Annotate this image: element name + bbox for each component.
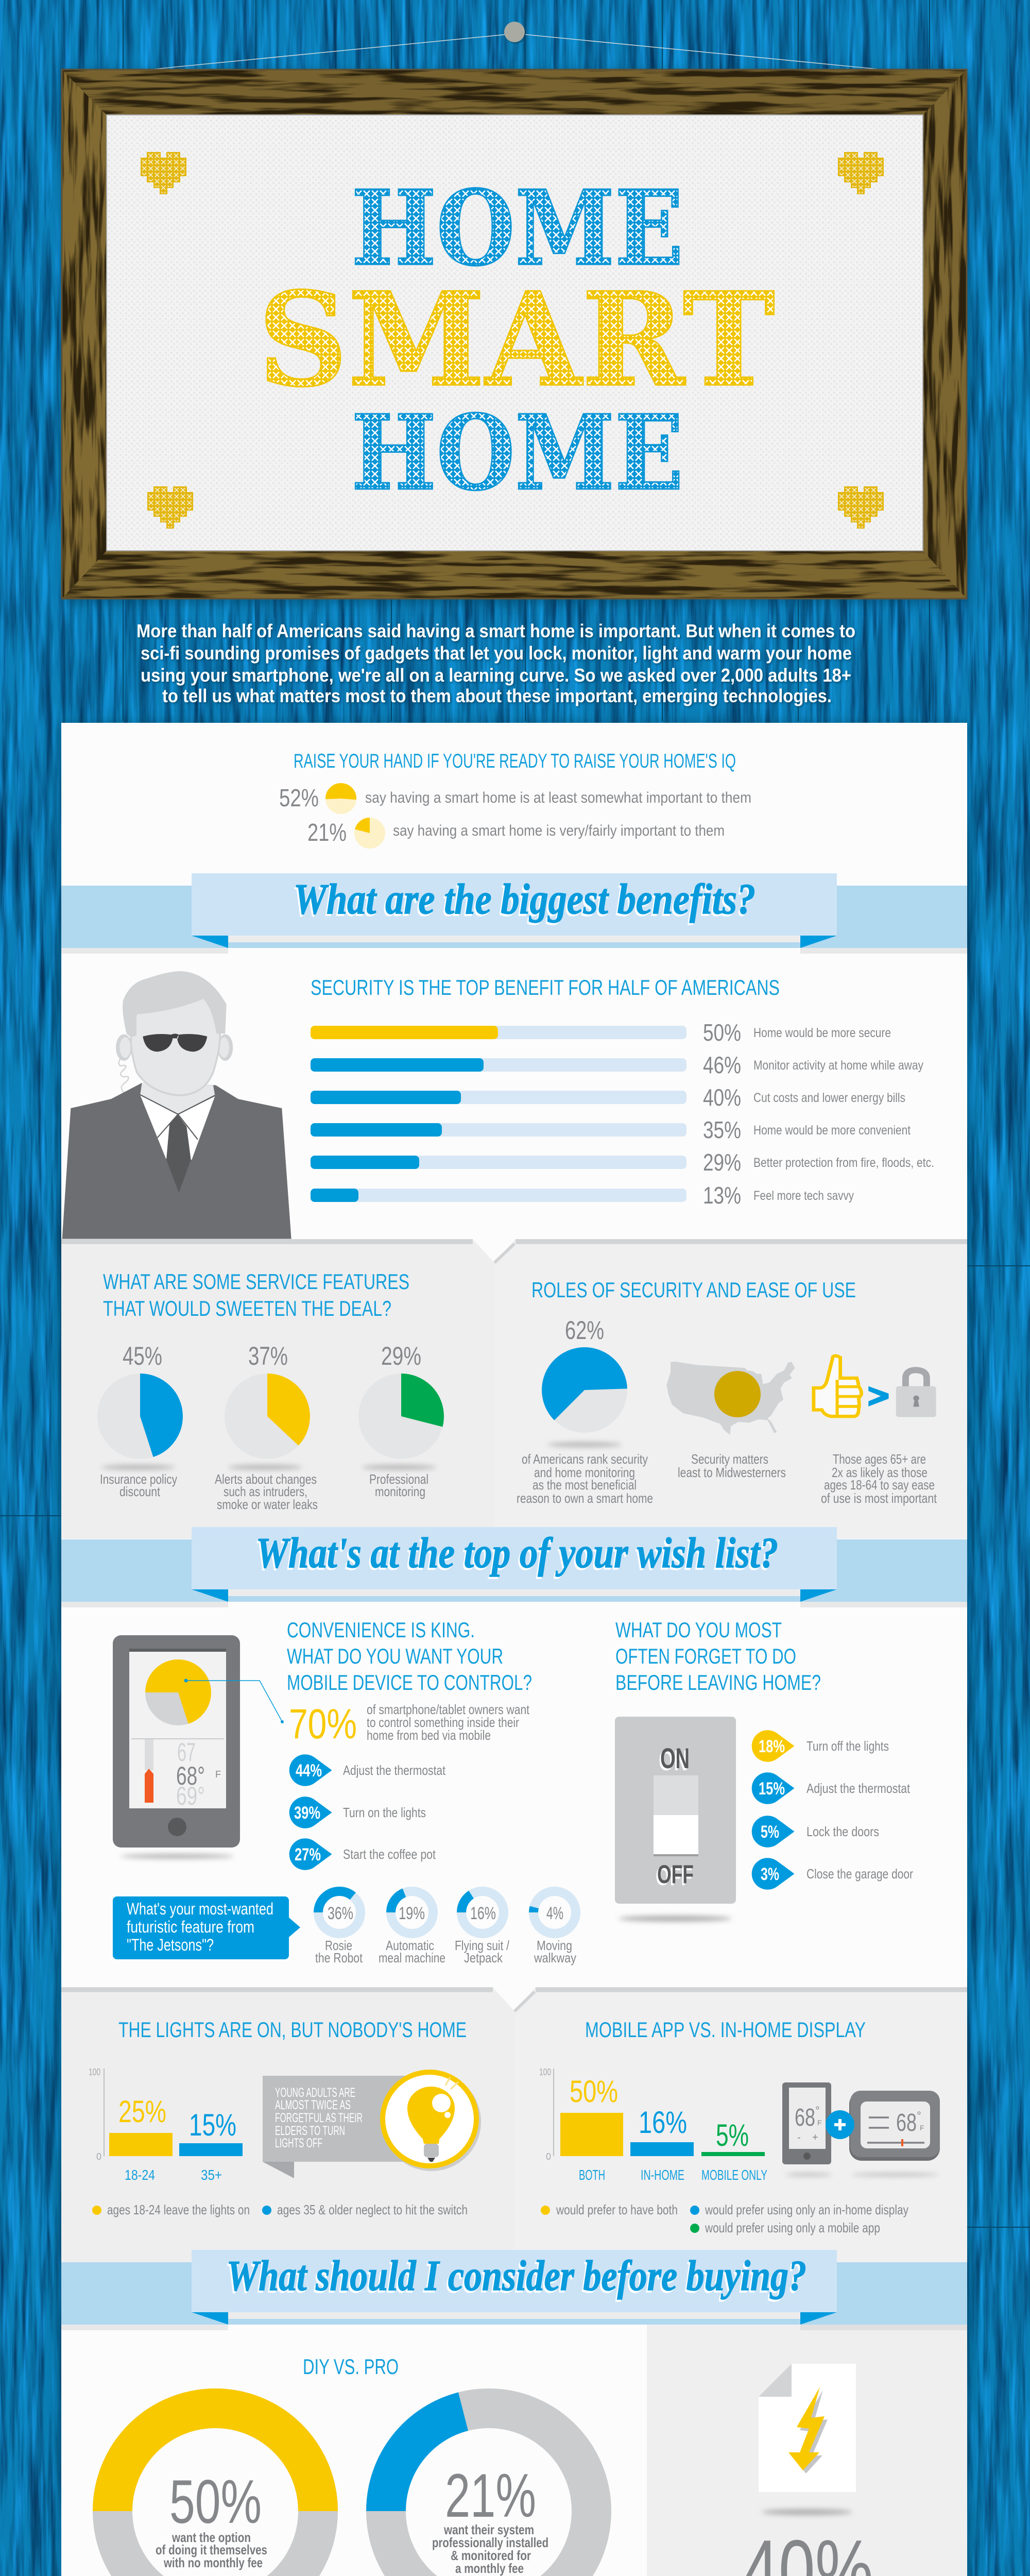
banner: what should I consider [61, 2250, 967, 2330]
stat: 52 percent: 52% [279, 785, 319, 812]
item: 39 percent: Turn on the lights [343, 1805, 426, 1820]
map: midwest highlighted [666, 1362, 795, 1480]
item: 39 percent: 39% [294, 1803, 320, 1823]
pie: 62 percent [517, 1316, 653, 1506]
title: HOME: HOME [351, 393, 683, 514]
heading: THE LIGHTS ARE ON, BUT NOBODY'S HOME [118, 2018, 467, 2042]
item: 15 percent: Adjust the thermostat [806, 1781, 911, 1796]
bar chart: lights left on: 15% [189, 2108, 236, 2142]
item: 15 percent: 15% [759, 1779, 785, 1799]
pie: 29 percent: 29% [381, 1342, 421, 1370]
illustration: light switch [615, 1717, 736, 1922]
donut: 21 percent: professionally installed [432, 2535, 548, 2550]
callout: young adults with light bulb: LIGHTS OFF [275, 2136, 322, 2150]
illustration: phone plus thermostat: - [797, 2132, 801, 2143]
heading [287, 1618, 532, 1694]
icon: thumbs up greater than lock: Those ages 65+ are [833, 1451, 926, 1467]
donut: 21 percent: 21% [445, 2461, 536, 2530]
donut: 50 percent [107, 2408, 323, 2576]
panel: diy vs pro [107, 2354, 597, 2576]
bar: convenient [311, 1116, 911, 1143]
panel: convenience is king [287, 1618, 532, 1870]
panel: roles of security and ease of use [517, 1278, 937, 1506]
donut: 50 percent: want the option [171, 2530, 251, 2545]
illustration: security man [62, 971, 291, 1239]
pie: 37 percent [215, 1342, 318, 1512]
illustration: phone plus thermostat: F [817, 2119, 822, 2127]
heading: raise your hand: RAISE YOUR HAND IF YOU'RE READY TO RAISE YOUR HOME'S IQ [294, 750, 736, 772]
donut: rosie the robot: the Robot [315, 1950, 363, 1965]
bar: cut costs [311, 1084, 905, 1111]
bar: protection: 29% [703, 1149, 741, 1176]
pie: 62 percent: reason to own a smart home [517, 1490, 653, 1506]
bar: home more secure: Home would be more secure [753, 1026, 891, 1040]
panel: service features [97, 1269, 444, 1512]
heading: MOBILE DEVICE TO CONTROL? [287, 1670, 532, 1694]
callout: jetsons: futuristic feature from [127, 1918, 254, 1936]
icon: heart bottom right [838, 487, 883, 528]
bar chart: app or display: IN-HOME [641, 2167, 684, 2183]
bar chart: lights left on [89, 2067, 243, 2183]
pie: 37 percent: smoke or water leaks [217, 1497, 318, 1512]
bar chart: lights left on: 100 [89, 2067, 100, 2077]
pie: 37 percent: Alerts about changes [215, 1471, 317, 1487]
panel: most often forget [615, 1618, 913, 1922]
donut: 21 percent: a monthly fee [455, 2561, 524, 2576]
illustration: phone plus thermostat [782, 2082, 940, 2176]
donut: 50 percent: of doing it themselves [156, 2542, 267, 2557]
panel: mobile app vs in-home display [539, 2018, 940, 2235]
heading: CONVENIENCE IS KING. [287, 1618, 475, 1642]
pie: 62 percent: and home monitoring [534, 1465, 635, 1480]
illustration: phone with thermostat: 67 [177, 1738, 196, 1767]
legend: app or display: would prefer using only an in-home display [705, 2202, 908, 2217]
legend: app or display [541, 2202, 908, 2235]
callout: young adults with light bulb: YOUNG ADULTS ARE [275, 2086, 355, 2100]
pie: 45 percent: 45% [123, 1342, 162, 1370]
donut: flying suit: Flying suit / [455, 1938, 510, 1953]
icon: heart bottom left [148, 487, 193, 528]
bar chart: lights left on: 18-24 [125, 2167, 155, 2183]
illustration: phone plus thermostat: ° [815, 2104, 820, 2117]
item: 3 percent [752, 1858, 913, 1890]
illustration: light switch: OFF [657, 1860, 694, 1889]
intro paragraph: to tell us what matters most to them about these important, emerging technologies. [162, 685, 832, 706]
bar chart: app or display: MOBILE ONLY [701, 2167, 767, 2183]
icon: thumbs up greater than lock: 2x as likely as those [832, 1465, 928, 1480]
illustration: phone plus thermostat: F [920, 2124, 924, 2132]
heading: WHAT ARE SOME SERVICE FEATURES [103, 1269, 409, 1294]
icon: thumbs up greater than lock: ages 18-64 to say ease [824, 1477, 935, 1493]
stat: 70 percent [289, 1701, 530, 1748]
legend: app or display: would prefer using only a mobile app [705, 2220, 880, 2235]
item: 44 percent: Adjust the thermostat [343, 1762, 446, 1778]
item: 15 percent [752, 1772, 911, 1804]
legend: app or display: would prefer to have both [556, 2202, 678, 2217]
pie: 37 percent: such as intruders, [224, 1484, 307, 1499]
heading: security: SECURITY IS THE TOP BENEFIT FOR HALF OF AMERICANS [311, 975, 780, 999]
pie: 45 percent: discount [119, 1484, 161, 1499]
donut: moving walkway: walkway [534, 1950, 576, 1965]
bar chart: app or display: BOTH [579, 2167, 605, 2183]
cross-stitch canvas [107, 115, 923, 551]
donut: meal machine [379, 1891, 445, 1965]
bar chart: app or display: 5% [716, 2118, 749, 2153]
item: 3 percent: 3% [761, 1865, 779, 1884]
bar chart: app or display: 16% [639, 2105, 687, 2140]
bar: cut costs: 40% [703, 1084, 741, 1111]
bar: protection [311, 1149, 934, 1176]
illustration: phone with thermostat: 68° [176, 1761, 205, 1790]
panel: energy bill [734, 2364, 880, 2576]
bar chart: lights left on: 25% [118, 2094, 166, 2129]
item: 27 percent: 27% [295, 1845, 321, 1865]
item: 3 percent: Close the garage door [806, 1866, 913, 1882]
donut: 50 percent: with no monthly fee [163, 2555, 263, 2570]
donut: rosie the robot: Rosie [325, 1938, 352, 1953]
heading: WHAT DO YOU MOST [615, 1618, 782, 1642]
intro paragraph: using your smartphone, we're all on a learning curve. So we asked over 2,000 adults 18+ [141, 665, 851, 686]
donut: meal machine: Automatic [386, 1938, 434, 1953]
banner: top of your wish list [61, 1527, 967, 1607]
bar chart: lights left on: 35+ [201, 2167, 222, 2183]
stat: 70 percent: 70% [289, 1701, 357, 1748]
panel: lights are on [89, 2018, 481, 2217]
heading: OFTEN FORGET TO DO [615, 1644, 796, 1668]
icon: heart top right [838, 152, 883, 194]
callout: jetsons: "The Jetsons"? [127, 1936, 214, 1954]
callout: jetsons [113, 1896, 300, 1959]
bar: tech savvy: Feel more tech savvy [753, 1189, 854, 1203]
intro paragraph: More than half of Americans said having a smart home is important. But when it comes to [136, 620, 855, 641]
bar chart: app or display [539, 2067, 767, 2183]
callout: young adults with light bulb [263, 2072, 481, 2178]
item: 39 percent [289, 1797, 426, 1828]
donut: moving walkway: 4% [546, 1904, 563, 1923]
donut: rosie the robot: 36% [328, 1904, 353, 1923]
bar: tech savvy [311, 1182, 854, 1209]
pie: 62 percent: of Americans rank security [522, 1451, 648, 1467]
legend: lights [92, 2202, 468, 2217]
pie: 29 percent [358, 1342, 444, 1499]
pie: 37 percent: 37% [248, 1342, 288, 1370]
heading [615, 1618, 821, 1694]
icon: thumbs up greater than lock: of use is most important [821, 1490, 937, 1506]
stat: 21 percent: 21% [307, 819, 347, 846]
item: 18 percent: 18% [759, 1737, 785, 1756]
main panel background [57, 723, 971, 2576]
heading: ROLES OF SECURITY AND EASE OF USE [531, 1278, 856, 1302]
stat: 70 percent: of smartphone/tablet owners want [367, 1702, 530, 1717]
item: 18 percent [752, 1730, 889, 1762]
callout: young adults with light bulb: FORGETFUL AS THEIR [275, 2111, 363, 2125]
bar: cut costs: Cut costs and lower energy bills [753, 1091, 905, 1105]
banner: top of your wish list: What's at the top of your wish list? [256, 1529, 778, 1577]
illustration: phone with thermostat: F [215, 1769, 221, 1780]
illustration: phone plus thermostat: 68 [795, 2104, 815, 2131]
illustration: phone with thermostat: 69° [176, 1782, 205, 1810]
icon: heart top left [141, 152, 186, 194]
item: 18 percent: Turn off the lights [806, 1738, 889, 1754]
donut: meal machine: 19% [399, 1904, 425, 1923]
item: 44 percent [289, 1754, 446, 1786]
donut: flying suit: 16% [470, 1904, 496, 1923]
donut: 21 percent: & monitored for [451, 2548, 531, 2563]
item: 44 percent: 44% [296, 1761, 322, 1781]
stat: 52 percent: say having a smart home is at least somewhat important to them [365, 789, 751, 806]
callout: young adults with light bulb: ELDERS TO TURN [275, 2124, 345, 2138]
title: HOME: HOME [351, 168, 683, 289]
callout: young adults with light bulb: ALMOST TWICE AS [275, 2098, 351, 2112]
title: SMART: SMART [258, 264, 775, 415]
bar: home more secure [311, 1019, 891, 1046]
bar: convenient: Home would be more convenient [753, 1123, 911, 1138]
bar chart: app or display: 50% [570, 2074, 618, 2109]
bar: protection: Better protection from fire, floods, etc. [753, 1156, 934, 1170]
bar chart: app or display: 100 [539, 2067, 551, 2077]
donut: 50 percent: 50% [169, 2467, 262, 2536]
donut: flying suit: Jetpack [464, 1950, 503, 1965]
icon: document with lightning bolt [759, 2364, 856, 2515]
hanging wire and nail [154, 22, 877, 69]
bar chart: app or display: 0 [546, 2151, 551, 2162]
item: 27 percent [289, 1838, 436, 1870]
illustration: phone plus thermostat: 68 [896, 2109, 917, 2137]
wooden picture frame [61, 69, 970, 603]
item: 5 percent [752, 1816, 879, 1848]
item: 5 percent: 5% [761, 1822, 779, 1842]
illustration: phone with thermostat [113, 1635, 284, 1859]
pie: 45 percent: Insurance policy [100, 1471, 177, 1487]
stat: 70 percent: to control something inside their [367, 1715, 519, 1730]
intro paragraph: sci-fi sounding promises of gadgets that let you lock, monitor, light and warm your home [141, 642, 852, 664]
bar chart: lights left on: 0 [96, 2151, 101, 2162]
donut: moving walkway [534, 1891, 576, 1965]
bar: convenient: 35% [703, 1116, 741, 1143]
heading: DIY VS. PRO [303, 2354, 399, 2379]
callout: jetsons: What's your most-wanted [127, 1900, 273, 1918]
bar: monitor activity: 46% [703, 1052, 741, 1078]
donut: flying suit [455, 1891, 510, 1965]
bar chart: benefits [311, 1019, 934, 1209]
icon: thumbs up greater than lock [814, 1356, 937, 1506]
banner: what are the biggest benefits [61, 873, 967, 954]
map: midwest highlighted: Security matters [691, 1451, 768, 1467]
heading: MOBILE APP VS. IN-HOME DISPLAY [585, 2018, 866, 2042]
bar: home more secure: 50% [703, 1019, 741, 1046]
banner: what should I consider: What should I consider before buying? [227, 2252, 806, 2300]
banner: what are the biggest benefits: What are the biggest benefits? [294, 875, 756, 923]
bar: tech savvy: 13% [703, 1182, 741, 1209]
stat: 21 percent [307, 818, 725, 849]
item: 27 percent: Start the coffee pot [343, 1846, 436, 1862]
donut: 21 percent [381, 2408, 597, 2576]
donut: 21 percent: want their system [443, 2522, 534, 2537]
donut: rosie the robot [315, 1891, 363, 1965]
legend: lights: ages 18-24 leave the lights on [107, 2202, 250, 2217]
pie: 29 percent: Professional [369, 1471, 428, 1487]
donut: meal machine: meal machine [379, 1950, 445, 1965]
item: 5 percent: Lock the doors [806, 1824, 879, 1839]
pie: 62 percent: as the most beneficial [533, 1477, 637, 1493]
bar: monitor activity: Monitor activity at home while away [753, 1058, 923, 1073]
stat: 52 percent [279, 783, 751, 814]
stat: 21 percent: say having a smart home is very/fairly important to them [393, 822, 725, 839]
pie: 29 percent: monitoring [375, 1484, 425, 1499]
illustration: phone plus thermostat: + [812, 2132, 818, 2143]
donut charts: jetsons features [315, 1891, 576, 1965]
stat: 70 percent: home from bed via mobile [367, 1727, 491, 1743]
heading [103, 1269, 409, 1320]
heading: THAT WOULD SWEETEN THE DEAL? [103, 1296, 391, 1320]
legend: lights: ages 35 & older neglect to hit the switch [277, 2202, 468, 2217]
intro paragraph [136, 620, 855, 706]
illustration: phone plus thermostat: ° [917, 2109, 921, 2122]
bar: monitor activity [311, 1052, 923, 1078]
pie: 62 percent: 62% [565, 1316, 604, 1345]
map: midwest highlighted: least to Midwesterners [678, 1465, 786, 1480]
pie: 45 percent [97, 1342, 183, 1499]
donut: moving walkway: Moving [537, 1938, 572, 1953]
heading: BEFORE LEAVING HOME? [615, 1670, 821, 1694]
heading: WHAT DO YOU WANT YOUR [287, 1644, 503, 1668]
illustration: light switch: ON [660, 1742, 690, 1774]
